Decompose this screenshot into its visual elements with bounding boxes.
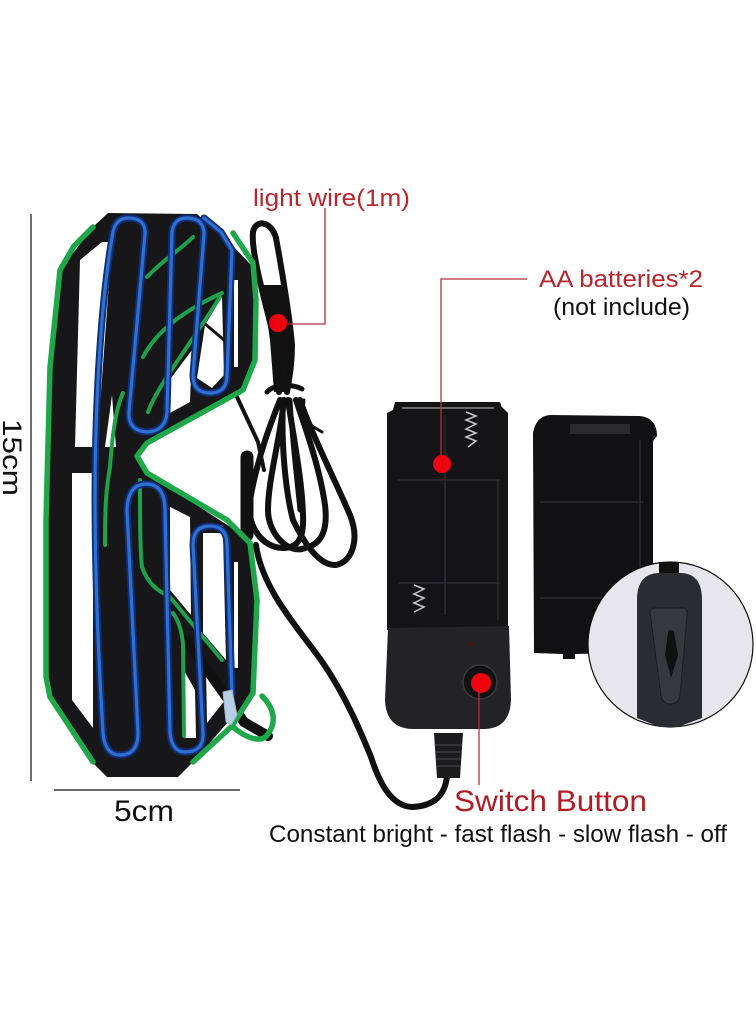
leader line [280,208,325,324]
top contact strip [402,407,494,409]
cover ribs [540,440,643,600]
inset: switch close-up [588,562,753,727]
top spring [466,412,476,447]
inset slider clip [650,608,687,704]
tray details [398,415,500,620]
clear wire tip [223,690,237,725]
bottom spring [414,585,424,612]
callout: light wire [253,185,410,332]
cable to controller [256,545,447,807]
glasses frame [45,213,257,777]
strain relief ribs [435,745,462,766]
leader line [441,279,527,464]
indicator hole [468,641,474,647]
callout: batteries [433,266,703,473]
cover notch [570,424,630,434]
battery cover [533,415,657,659]
blue wire [95,218,232,755]
inset circle [588,562,753,727]
note: (not include) [553,294,690,321]
cover body [533,415,657,659]
inset cable [659,562,679,574]
modes: Constant bright - fast flash - slow flash - off [269,821,727,848]
battery tray [387,402,508,630]
green wire outline [46,227,273,762]
strain relief [434,733,463,778]
inset switch body [637,573,702,727]
callout: switch button [269,673,727,848]
inner green wire [105,237,222,736]
battery controller [385,402,511,778]
width label: 5cm [114,795,174,828]
glasses [45,213,273,777]
black wire ends behind lens [186,640,268,736]
label: AA batteries*2 [539,266,703,293]
control head [385,626,511,729]
marker [471,673,491,693]
switch ring [463,665,497,699]
marker [433,455,451,473]
width line [54,789,240,791]
black wire coil [204,223,447,807]
label: light wire(1m) [253,185,410,212]
inset slot [665,630,678,678]
label: Switch Button [454,785,647,818]
marker [269,314,287,332]
height line [30,214,32,781]
leader line [478,690,480,785]
